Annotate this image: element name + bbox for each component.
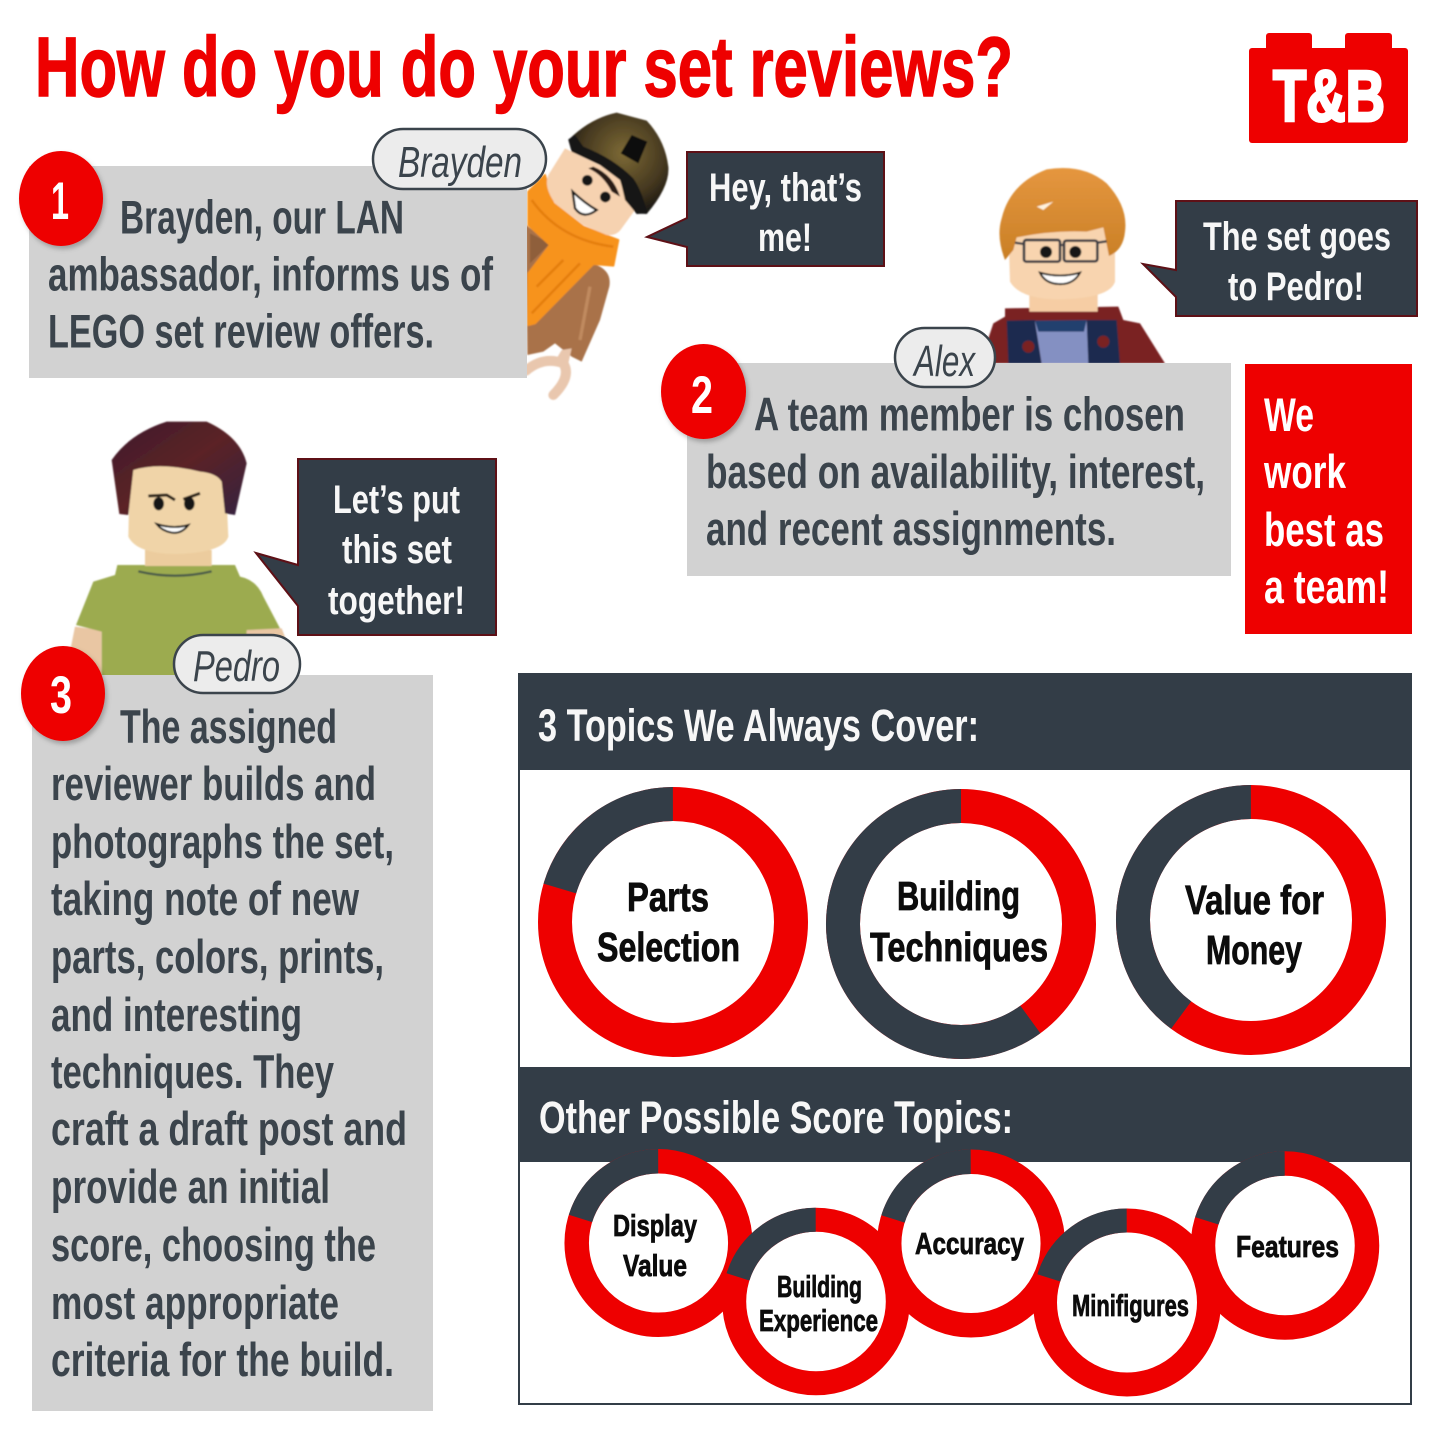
text: step 3: and interesting — [51, 988, 302, 1041]
donut: Parts Selection: Parts — [627, 874, 709, 920]
speech bubble: Brayden: Hey, that’s — [709, 166, 862, 210]
donut: Parts Selection — [526, 775, 820, 1069]
panel: step 2 — [687, 363, 1231, 576]
donut: Minifigures — [1024, 1200, 1230, 1405]
heading: other topics: Other Possible Score Topics: — [539, 1092, 1013, 1143]
name tag: Pedro — [174, 635, 300, 693]
number badge 1 — [19, 151, 103, 246]
text: step 3: reviewer builds and — [51, 757, 376, 810]
logo: T&B brick: T&B — [1273, 57, 1385, 137]
panel: step 1 — [29, 166, 527, 378]
heading: 3 topics: 3 Topics We Always Cover: — [538, 700, 979, 751]
heading: 3 topics — [518, 673, 1412, 770]
donut: Value for Money: Value for — [1185, 877, 1324, 923]
panel: step 3 — [32, 675, 433, 1411]
donut: Building Techniques: Building — [897, 873, 1020, 919]
donut: Building Techniques: Techniques — [870, 924, 1048, 970]
speech bubble: Brayden — [647, 152, 884, 266]
text: step 1: Brayden, our LAN — [120, 190, 404, 244]
name tag: Alex: Alex — [912, 337, 976, 386]
text: step 3 — [51, 700, 407, 1386]
name tag: Brayden — [373, 129, 546, 189]
donut: Display Value: Display — [613, 1208, 698, 1243]
name tag: Brayden: Brayden — [398, 138, 522, 187]
text: step 2: A team member is chosen — [754, 388, 1185, 440]
logo: T&B brick — [1249, 33, 1408, 143]
donut: Features — [1182, 1143, 1388, 1348]
callout: We work best as a team — [1245, 364, 1412, 634]
text: step 3: craft a draft post and — [51, 1102, 407, 1155]
text: step 3: parts, colors, prints, — [51, 930, 384, 983]
donut: Features: Features — [1236, 1229, 1339, 1264]
callout: We work best as a team: We — [1264, 388, 1314, 441]
number badge 3: 3 — [50, 666, 72, 725]
title: How do you do your set reviews? — [35, 20, 1013, 114]
heading: other topics — [518, 1067, 1412, 1162]
callout: We work best as a team: work — [1263, 445, 1347, 498]
text: step 3: The assigned — [120, 700, 337, 753]
text: step 1: LEGO set review offers. — [48, 304, 434, 358]
donut: Building Experience: Experience — [759, 1303, 878, 1338]
minifigure: Alex — [980, 168, 1165, 363]
panel: score topics — [518, 673, 1416, 1405]
number badge 1: 1 — [51, 172, 69, 231]
callout: We work best as a team: best as — [1264, 503, 1384, 556]
name tag: Pedro: Pedro — [193, 642, 280, 691]
speech bubble: Pedro: Let’s put — [333, 478, 460, 522]
text: step 3: photographs the set, — [51, 815, 394, 868]
speech bubble: Pedro: together! — [328, 579, 465, 623]
donut: Building Experience: Building — [777, 1269, 862, 1304]
number badge 2 — [661, 344, 746, 439]
donut: Building Techniques — [796, 759, 1126, 1089]
number badge 2: 2 — [691, 366, 713, 425]
text: step 3: techniques. They — [51, 1045, 334, 1098]
speech bubble: Pedro: this set — [342, 528, 452, 572]
donut: Parts Selection: Selection — [597, 924, 740, 970]
text: step 3: most appropriate — [51, 1276, 339, 1329]
donut: Display Value — [556, 1140, 761, 1346]
donut: Display Value: Value — [623, 1248, 687, 1283]
text: step 1 — [48, 190, 493, 358]
donut: Building Experience — [713, 1199, 919, 1404]
callout: We work best as a team: a team! — [1264, 560, 1389, 613]
name tag: Alex — [895, 328, 995, 387]
text: step 1: ambassador, informs us of — [48, 248, 493, 300]
text: step 3: provide an initial — [51, 1160, 330, 1213]
text: step 3: criteria for the build. — [51, 1333, 394, 1386]
text: step 3: taking note of new — [51, 872, 359, 925]
donut: Value for Money — [1086, 755, 1416, 1085]
speech bubble: Brayden: me! — [758, 216, 812, 260]
donut: Minifigures: Minifigures — [1072, 1288, 1189, 1323]
donut: Accuracy — [868, 1141, 1074, 1346]
donut: Accuracy: Accuracy — [915, 1226, 1025, 1261]
donut: Value for Money: Money — [1206, 927, 1302, 973]
speech bubble: Alex: to Pedro! — [1228, 265, 1364, 309]
text: step 2: based on availability, interest, — [706, 445, 1205, 498]
text: step 2: and recent assignments. — [706, 502, 1116, 555]
speech bubble: Pedro — [256, 459, 496, 635]
speech bubble: Alex — [1143, 201, 1417, 316]
text: step 2 — [706, 388, 1205, 555]
number badge 3 — [21, 646, 105, 741]
minifigure: Brayden — [526, 113, 668, 395]
minifigure: Pedro — [65, 422, 290, 677]
text: step 3: score, choosing the — [51, 1218, 376, 1271]
